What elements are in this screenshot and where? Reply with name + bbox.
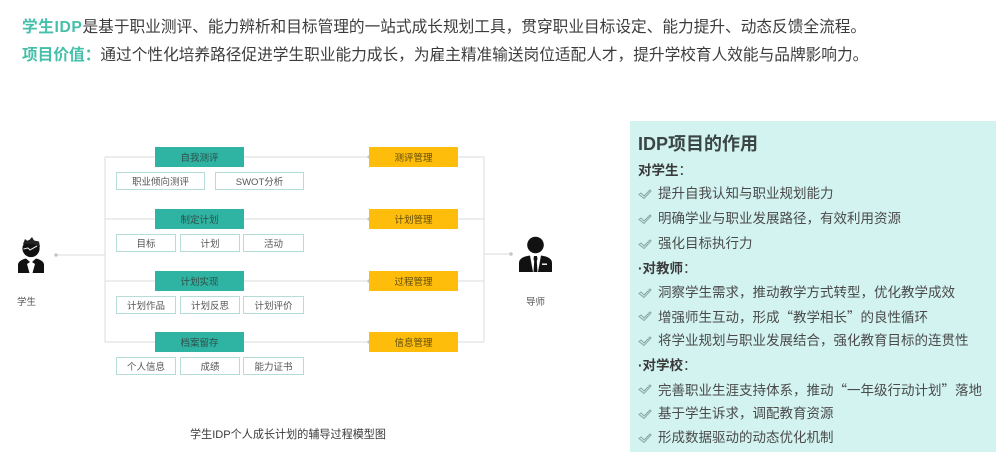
checklist item: 洞察学生需求，推动教学方式转型，优化教学成效 [658,285,955,300]
stage 3: plan realization [116,271,458,314]
header: self assessment [155,147,244,167]
sub-item [180,357,240,375]
label: mentor: 导师 [526,297,545,308]
header: archive: 档案留存 [180,338,218,349]
manager box: process management: 过程管理 [394,277,432,288]
sub-item [116,296,176,314]
manager box: information management: 信息管理 [394,338,432,349]
panel: role of the IDP project [630,121,996,452]
icon: student [18,237,44,273]
sub-item [243,234,304,252]
sub-item: 计划 [200,239,220,250]
header: make a plan [155,209,244,229]
sub-item [243,357,304,375]
checklist item: 明确学业与职业发展路径，有效利用资源 [658,211,901,226]
header: plan realization: 计划实现 [180,277,218,288]
manager box: process management [369,271,458,291]
sub-item: 个人信息 [127,362,165,373]
sub-item [180,234,240,252]
sub-item [243,296,304,314]
sub-item [116,357,176,375]
checklist item: 形成数据驱动的动态优化机制 [658,430,834,445]
stage 1: self assessment [116,147,458,190]
checklist item: 提升自我认知与职业规划能力 [658,186,834,201]
sub-item: 能力证书 [254,362,292,373]
manager box: information management [369,332,458,352]
sub-item: 计划作品 [127,301,165,312]
sub-item [116,172,205,190]
manager box: assessment management [369,147,458,167]
icon: mentor [519,236,552,272]
checklist item: 将学业规划与职业发展结合，强化教育目标的连贯性 [658,333,968,348]
sub-item [116,234,176,252]
sub-item: 职业倾向测评 [132,177,189,188]
stage 4: archive [116,332,458,375]
intro text: project value: 项目价值：通过个性化培养路径促进学生职业能力成长，为雇主精准输送岗位适配人才，提升学校育人效能与品牌影响力。 [22,47,868,64]
chart caption: 学生IDP个人成长计划的辅导过程模型图 [190,429,386,441]
sub-item: 目标 [136,239,156,250]
subheading: for students: 对学生： [638,163,692,178]
manager box: plan management [369,209,458,229]
intro text: student IDP definition: 学生IDP是基于职业测评、能力辨析和目标管理的一站式成长规划工具，贯穿职业目标设定、能力提升、动态反馈全流程。 [22,19,866,36]
label: student: 学生 [17,297,36,308]
header: self assessment: 自我测评 [180,153,218,164]
sub-item: SWOT分析 [236,177,283,188]
sub-item: 计划反思 [191,301,229,312]
header: archive [155,332,244,352]
subheading: for teachers: ·对教师： [638,261,696,276]
panel heading: IDP项目的作用 [638,134,758,154]
header: make a plan: 制定计划 [180,215,218,226]
stage 2: make a plan [116,209,458,252]
manager box: plan management: 计划管理 [394,215,432,226]
checklist item: 基于学生诉求，调配教育资源 [658,406,834,421]
checklist item: 强化目标执行力 [658,236,752,251]
sub-item: 成绩 [200,362,220,373]
sub-item: 活动 [264,239,283,250]
header: plan realization [155,271,244,291]
checklist item: 增强师生互动，形成“教学相长”的良性循环 [658,306,928,326]
sub-item [180,296,240,314]
subheading: for schools: ·对学校： [638,358,696,373]
sub-item [215,172,304,190]
sub-item: 计划评价 [254,301,292,312]
checklist item: 完善职业生涯支持体系，推动“一年级行动计划”落地 [658,379,982,399]
manager box: assessment management: 测评管理 [394,153,432,164]
